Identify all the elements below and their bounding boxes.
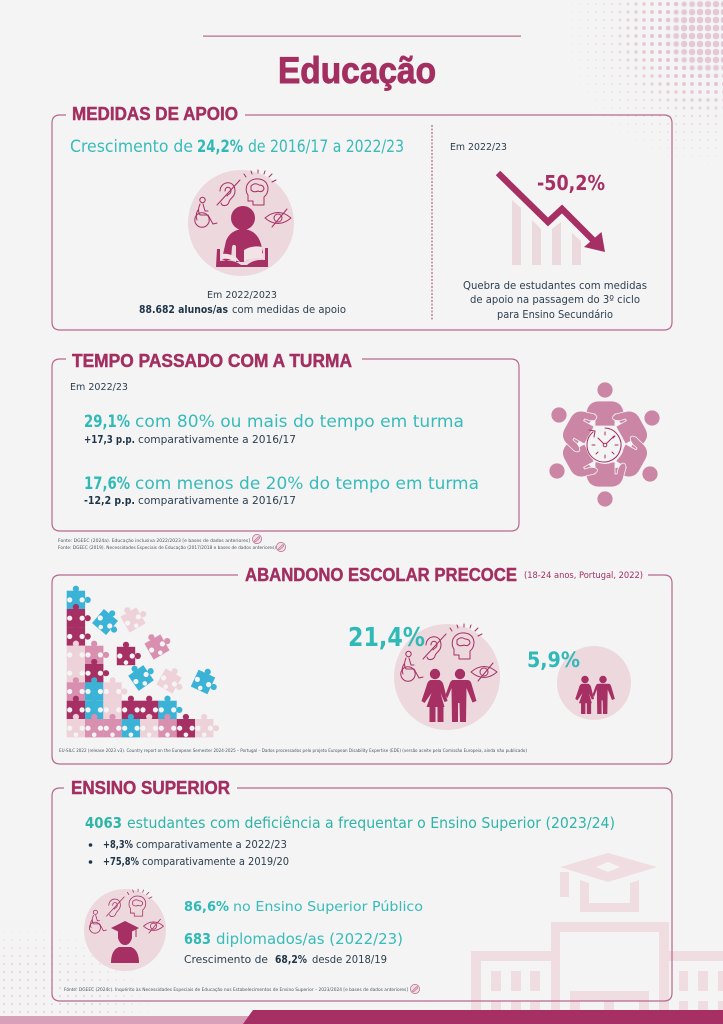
subheading: age, country, year: (18-24 anos, Portugal, 2022) (524, 570, 643, 581)
label: em 2022/23: Em 2022/23 (70, 382, 128, 393)
footer band (0, 1010, 723, 1024)
panel: ensino superior (52, 778, 672, 1001)
bullet list: comparisons: comparativamente a 2019/20 (142, 856, 289, 868)
caption: drop in students: de apoio na passagem do 3º ciclo (470, 294, 640, 306)
stat: 17,6%: comparativamente a 2016/17 (138, 495, 296, 507)
caption: drop in students: para Ensino Secundário (497, 309, 613, 321)
stat: 17,6% (84, 474, 479, 507)
growth statement: 24,2% (197, 137, 243, 156)
stat: -50,2%: -50,2% (537, 171, 605, 195)
halftone dots: top right (579, 0, 723, 156)
stat: 5,9%: 5,9% (527, 648, 580, 672)
icon: small couple (557, 646, 631, 720)
stat: 17,6%: 17,6% (84, 474, 130, 493)
stat: 4063 students: 4063 (85, 814, 122, 832)
halftone dots: bottom left (3, 932, 141, 1013)
stat: students with support measures: Em 2022/2023 (207, 290, 277, 301)
stat: growth 68,2% (184, 954, 387, 966)
stat: growth 68,2%: 68,2% (275, 954, 307, 966)
source notes: tempo passado: Fonte: DGEEC (2019). Necessidades Especiais de Educação (2017/2018 e bases de dados anteriores) (58, 545, 276, 551)
stat: 29,1%: com 80% ou mais do tempo em turma (135, 412, 464, 431)
bullet list: comparisons: +75,8% (103, 856, 139, 868)
source note: ensino superior: Fonte: DGEEC (2024c). Inquérito às Necessidades Especiais de Educação nos Estabelecimentos de Ensino Superior – 2023/2024 [e bases de dados anteriores] (64, 986, 408, 993)
stat: 4063 students: estudantes com deficiência a frequentar o Ensino Superior (2023/24) (127, 814, 615, 832)
source notes: tempo passado: Fonte: DGEEC (2024a). Educação inclusiva 2022/2023 [e bases de dados anteriores] (58, 538, 250, 544)
stat: growth 68,2%: Crescimento de (184, 954, 268, 966)
heading: ensino superior: ENSINO SUPERIOR (71, 778, 230, 798)
icon: student reading with disability symbols (188, 170, 294, 276)
source note: abandono: EU-SILC 2022 (release 2023 v3). Country report on the European Semester 2024-2025 – Portugal – Dados processados pelo projeto European Disability Expertise (EDE) (versão aceite pela Comissão Europeia, ainda não publicado) (59, 748, 527, 754)
heading: medidas de apoio: MEDIDAS DE APOIO (72, 104, 238, 124)
stat: 17,6%: -12,2 p.p. (84, 495, 135, 507)
stat: 86,6% public higher education: no Ensino Superior Público (233, 899, 423, 915)
stat: 29,1% (84, 412, 464, 446)
stat: 29,1%: +17,3 p.p. (84, 434, 135, 446)
growth statement: Crescimento de (70, 137, 193, 156)
title: Educação (278, 50, 436, 91)
stat: students with support measures: com medidas de apoio (232, 304, 346, 316)
heading: abandono escolar precoce: ABANDONO ESCOLAR PRECOCE (245, 565, 517, 585)
stat: students with support measures (139, 290, 346, 316)
stat: 17,6%: com menos de 20% do tempo em turma (135, 474, 479, 493)
panel: tempo passado com a turma (52, 351, 519, 531)
stat: 683 graduates: diplomados/as (2022/23) (216, 930, 403, 948)
panel: abandono escolar precoce (52, 565, 672, 764)
stat: 683 graduates: 683 (184, 930, 211, 948)
icon: couple with disability symbols (394, 624, 500, 730)
growth statement (70, 137, 404, 156)
stat: 21,4%: 21,4% (348, 623, 425, 653)
top rule (203, 36, 521, 37)
stat: 29,1%: comparativamente a 2016/17 (138, 434, 296, 446)
stat: 86,6% public higher education: 86,6% (184, 899, 229, 915)
growth statement: de 2016/17 a 2022/23 (248, 137, 404, 156)
bullet list: comparisons (89, 839, 289, 868)
caption: drop in students: Quebra de estudantes com medidas (463, 280, 647, 292)
stat: students with support measures: 88.682 alunos/as (139, 304, 228, 316)
source notes: tempo passado (58, 534, 286, 552)
icon: people around a clock (549, 382, 660, 507)
stat: growth 68,2%: desde 2018/19 (312, 954, 387, 966)
bullet list: comparisons: comparativamente a 2022/23 (136, 839, 287, 851)
stat: 29,1%: 29,1% (84, 412, 130, 431)
icon: graduate with disability symbols (84, 889, 166, 971)
caption: drop in students (463, 280, 647, 321)
chart: falling bars and arrow (498, 173, 605, 265)
background icon: university building with graduation cap (471, 853, 723, 1010)
heading: tempo passado com a turma: TEMPO PASSADO COM A TURMA (72, 351, 352, 371)
bullet list: comparisons: +8,3% (103, 839, 133, 851)
panel: medidas de apoio (52, 104, 672, 330)
source note: ensino superior (64, 984, 420, 994)
illustration: puzzle pieces (67, 586, 223, 737)
label: em 2022/23: Em 2022/23 (450, 142, 507, 153)
